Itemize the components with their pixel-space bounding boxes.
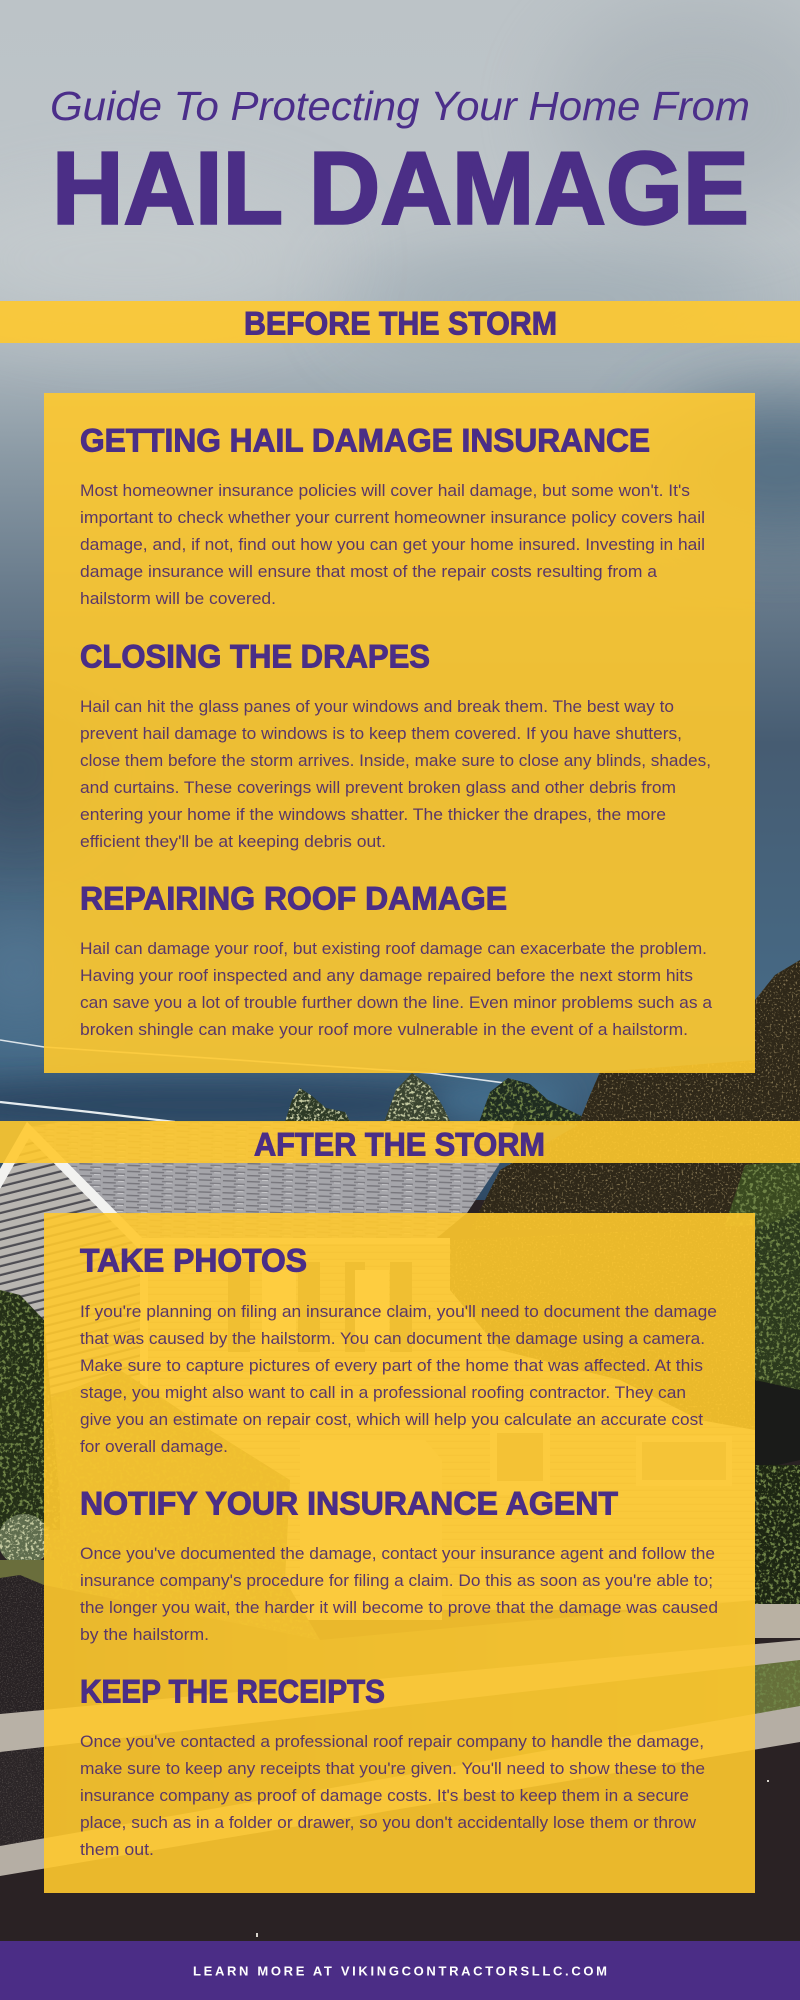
section banner: after the storm xyxy=(0,1121,800,1163)
panel: after the storm xyxy=(44,1213,755,1893)
section banner: before the storm: BEFORE THE STORM xyxy=(244,306,557,342)
text block: insurance: damage, and, if not, find out how you can get your home insured. Investing in hail xyxy=(80,536,705,554)
heading: keep the receipts: KEEP THE RECEIPTS xyxy=(80,1674,385,1710)
text block: receipts xyxy=(80,1733,705,1859)
subtitle line: Guide To Protecting Your Home From xyxy=(50,83,750,129)
text block: notify: insurance company's procedure for filing a claim. Do this as soon as you're able to; xyxy=(80,1572,713,1590)
text block: photos: stage, you might also want to call in a professional roofing contractor. They can xyxy=(80,1384,686,1402)
text block: photos: for overall damage. xyxy=(80,1438,228,1456)
text block: receipts: make sure to keep any receipts that you're given. You'll need to show these to the xyxy=(80,1760,705,1778)
text block: photos: If you're planning on filing an insurance claim, you'll need to document the damage xyxy=(80,1303,717,1321)
text block: drapes: efficient they'll be at keeping debris out. xyxy=(80,833,386,851)
heading: take photos: TAKE PHOTOS xyxy=(80,1242,307,1278)
main title: HAIL DAMAGE xyxy=(52,130,749,246)
text block: roof: can save you a lot of trouble further down the line. Even minor problems such as a xyxy=(80,994,713,1012)
title xyxy=(50,83,750,246)
text block: photos: Make sure to capture pictures of every part of the home that was affected. At this xyxy=(80,1357,703,1375)
text block: insurance: damage insurance will ensure that most of the repair costs resulting from a xyxy=(80,563,658,581)
heading: getting hail damage insurance: GETTING HAIL DAMAGE INSURANCE xyxy=(80,422,650,458)
panel: before the storm xyxy=(44,393,755,1073)
text block: notify: by the hailstorm. xyxy=(80,1626,209,1644)
text block: roof: broken shingle can make your roof more vulnerable in the event of a hailstorm. xyxy=(80,1021,688,1039)
text block: notify: the longer you wait, the harder it will become to prove that the damage was caused xyxy=(80,1599,718,1617)
heading: repairing roof damage: REPAIRING ROOF DAMAGE xyxy=(80,880,507,916)
text block: insurance: Most homeowner insurance policies will cover hail damage, but some won't. It's xyxy=(80,482,690,500)
text block: receipts: them out. xyxy=(80,1841,154,1859)
text block: roof: Having your roof inspected and any damage repaired before the next storm hits xyxy=(80,967,693,985)
text block: notify: Once you've documented the damage, contact your insurance agent and follow the xyxy=(80,1545,715,1563)
section banner: after the storm: AFTER THE STORM xyxy=(254,1126,545,1162)
text block: drapes xyxy=(80,698,711,851)
section banner: before the storm xyxy=(0,301,800,343)
heading: notify your insurance agent: NOTIFY YOUR INSURANCE AGENT xyxy=(80,1486,618,1522)
text block: receipts: Once you've contacted a professional roof repair company to handle the damage, xyxy=(80,1733,704,1751)
text block: insurance: hailstorm will be covered. xyxy=(80,590,276,608)
text block: photos xyxy=(80,1303,717,1456)
text block: photos: that was caused by the hailstorm. You can document the damage using a camera. xyxy=(80,1330,705,1348)
text block: receipts: place, such as in a folder or drawer, so you don't accidentally lose them or throw xyxy=(80,1814,696,1832)
heading: closing the drapes: CLOSING THE DRAPES xyxy=(80,638,430,674)
text block: drapes: Hail can hit the glass panes of your windows and break them. The best way to xyxy=(80,698,674,716)
text block: insurance xyxy=(80,482,705,608)
footer bar xyxy=(0,1941,800,2000)
text block: drapes: close them before the storm arrives. Inside, make sure to close any blinds, shades, xyxy=(80,752,711,770)
text block: notify xyxy=(80,1545,718,1644)
text block: receipts: insurance company as proof of damage costs. It's best to keep them in a secure xyxy=(80,1787,689,1805)
footer call to action: LEARN MORE AT VIKINGCONTRACTORSLLC.COM xyxy=(193,1964,607,1978)
text block: photos: give you an estimate on repair cost, which will help you calculate an accurate cost xyxy=(80,1411,703,1429)
text block: insurance: important to check whether your current homeowner insurance policy covers hail xyxy=(80,509,705,527)
text block: roof xyxy=(80,940,713,1039)
text block: drapes: prevent hail damage to windows is to keep them covered. If you have shutters, xyxy=(80,725,682,743)
text block: drapes: entering your home if the windows shatter. The thicker the drapes, the more xyxy=(80,806,666,824)
text block: drapes: and curtains. These coverings will prevent broken glass and other debris from xyxy=(80,779,676,797)
text block: roof: Hail can damage your roof, but existing roof damage can exacerbate the problem. xyxy=(80,940,707,958)
